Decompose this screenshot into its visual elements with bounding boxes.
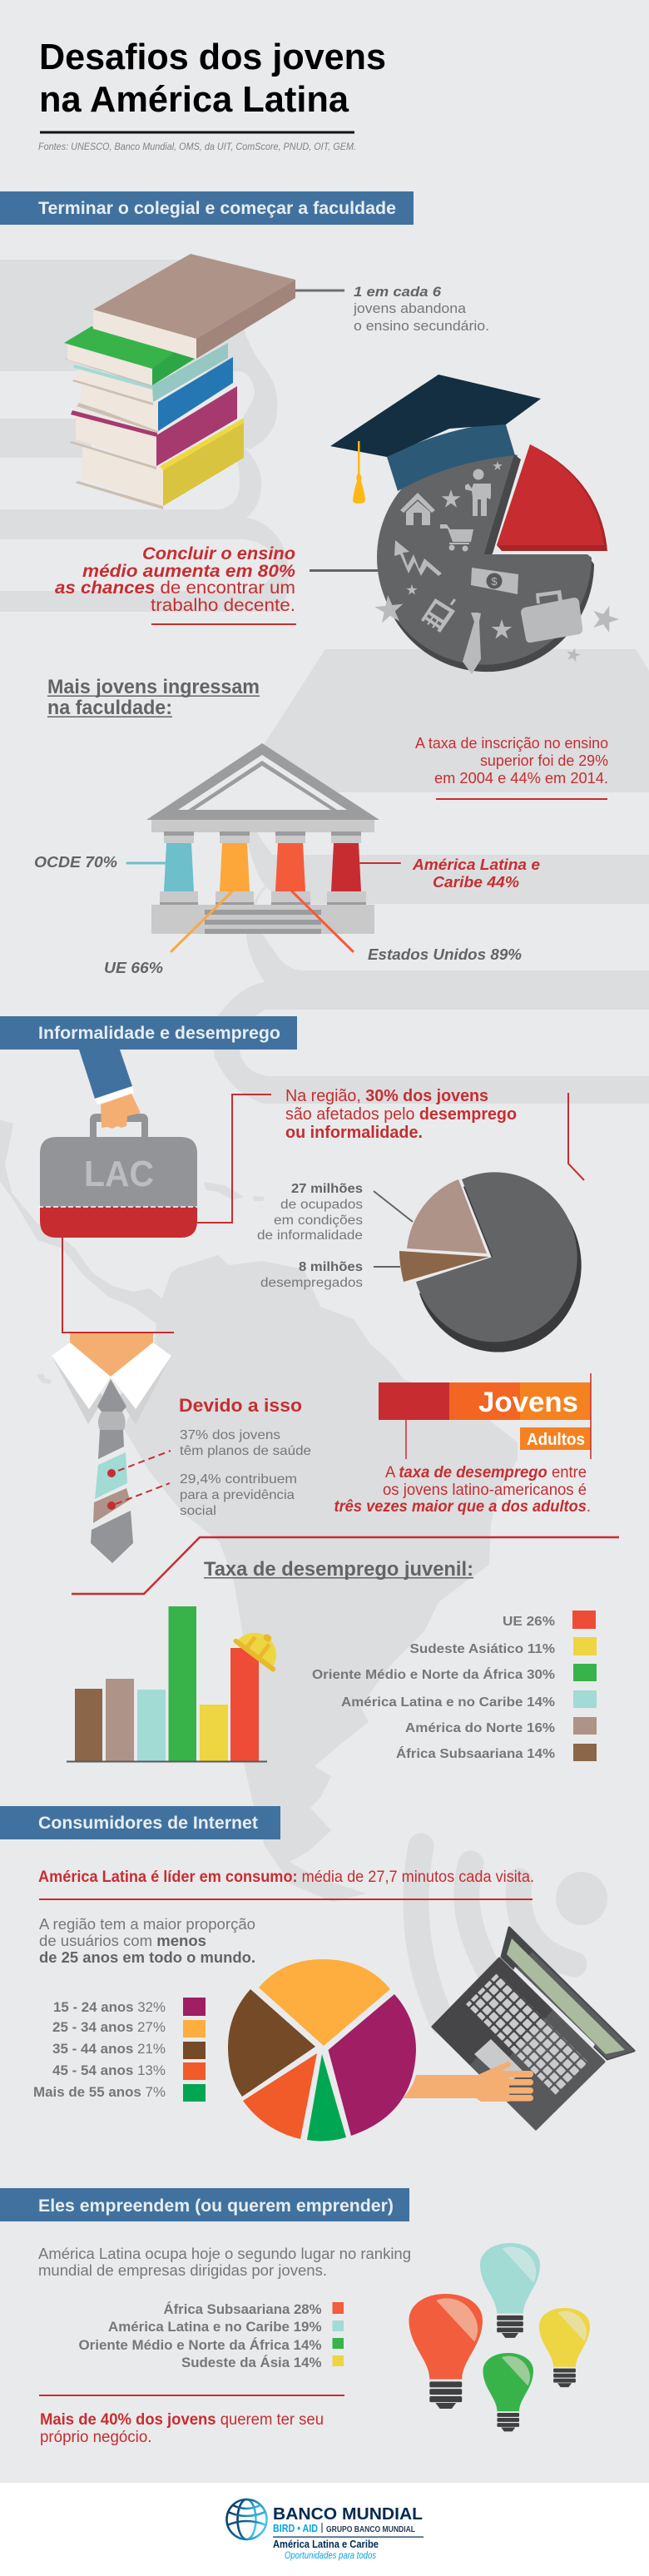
text: ranking mundial — [38, 2246, 411, 2279]
label: América Latina e Caribe: Caribe 44% — [433, 874, 519, 891]
illustration: arm holding LAC briefcase: LAC — [84, 1154, 154, 1194]
text: 1 em cada 6: o ensino secundário. — [354, 318, 489, 334]
text: 30% dos jovens: Na região, 30% dos jovens — [285, 1087, 488, 1105]
section banner: Eles empreendem: Eles empreendem (ou querem emprender) — [38, 2196, 394, 2216]
text: ranking mundial: América Latina ocupa hoje o segundo lugar no ranking — [38, 2246, 411, 2262]
text: taxa de desemprego: os jovens latino-americanos é — [383, 1482, 587, 1499]
label: América Latina e Caribe — [412, 856, 540, 891]
text: mais de 40% — [40, 2411, 324, 2446]
legend: age groups: 15 - 24 anos 32% — [53, 1999, 166, 2015]
pie chart: age groups — [228, 1959, 416, 2141]
legend: youth unemployment: Sudeste Asiático 11% — [409, 1642, 555, 1656]
text: concluir o ensino — [55, 544, 295, 615]
red connector lines — [62, 1093, 584, 1333]
slice: informalidade — [407, 1179, 487, 1253]
illustration: arm holding LAC briefcase — [38, 1050, 197, 1238]
bar: Adultos: Adultos — [527, 1431, 585, 1449]
text: taxa de desemprego — [334, 1464, 591, 1516]
text: concluir o ensino: Concluir o ensino — [142, 544, 295, 563]
legend: age groups: 45 - 54 anos 13% — [52, 2062, 166, 2078]
text: taxa de inscrição: A taxa de inscrição no ensino — [415, 735, 608, 752]
illustration: stack of books — [64, 254, 295, 509]
heading: Mais jovens ingressam — [47, 676, 260, 719]
label: 27 milhões: de ocupados — [280, 1198, 363, 1212]
logo text: Banco Mundial: BANCO MUNDIAL — [273, 2505, 423, 2524]
legend: youth unemployment: Oriente Médio e Norte da África 30% — [312, 1666, 555, 1682]
slice: mais de 55 anos — [307, 2054, 346, 2141]
text: previdência social — [180, 1472, 297, 1518]
slice: 45-54 anos — [243, 2053, 317, 2139]
illustration: laptop — [433, 1928, 634, 2129]
section banner: Informalidade — [0, 1016, 297, 1050]
legend: youth unemployment: UE 26% — [503, 1615, 555, 1629]
logo text: Banco Mundial — [273, 2505, 424, 2561]
section banner: Informalidade: Informalidade e desemprego — [38, 1024, 280, 1043]
heading: Devido a isso: Devido a isso — [179, 1395, 302, 1416]
title: Desafios dos jovens — [39, 37, 386, 77]
text: 30% dos jovens — [285, 1087, 517, 1142]
slice: 15-24 anos — [328, 1994, 416, 2136]
text: líder em consumo: América Latina é líder em consumo: média de 27,7 minutos cada visita. — [38, 1869, 534, 1886]
text: maior proporção: de 25 anos em todo o mundo. — [39, 1949, 255, 1966]
label: 27 milhões: em condições — [274, 1214, 363, 1228]
text: planos de saúde — [180, 1428, 311, 1458]
legend: youth unemployment: América Latina e no Caribe 14% — [341, 1695, 555, 1710]
legend: youth unemployment: África Subsaariana 14% — [396, 1745, 555, 1761]
heading: Mais jovens ingressam: Mais jovens ingressam — [47, 676, 260, 698]
bar chart: youth unemployment — [67, 1606, 290, 1763]
university building with four columns — [146, 743, 379, 934]
text: taxa de inscrição: superior foi de 29% — [480, 752, 608, 769]
bar: Jovens: Jovens — [478, 1387, 578, 1418]
text: taxa de inscrição: em 2004 e 44% em 2014. — [434, 770, 608, 787]
text: mais de 40%: Mais de 40% dos jovens querem ter seu — [40, 2411, 324, 2429]
sources: Fontes: UNESCO, Banco Mundial, OMS, da UIT, ComScore, PNUD, OIT, GEM. — [38, 141, 356, 152]
text: 1 em cada 6: 1 em cada 6 — [354, 284, 442, 300]
label: 27 milhões: 27 milhões — [291, 1182, 363, 1196]
illustration: shirt collar and tie — [52, 1333, 171, 1563]
slice: 25-34 anos — [259, 1959, 390, 2046]
label: 27 milhões — [257, 1182, 363, 1243]
column: América Latina e Caribe — [331, 843, 361, 891]
label: UE: UE 66% — [104, 960, 163, 976]
label: 27 milhões: de informalidade — [257, 1228, 363, 1243]
leader lines to columns — [127, 863, 400, 951]
logo text: Banco Mundial: GRUPO BANCO MUNDIAL — [326, 2525, 415, 2534]
text: concluir o ensino: as chances de encontrar um — [55, 578, 295, 598]
background pattern: stacked books — [0, 260, 649, 1104]
text: 30% dos jovens: são afetados pelo desemprego — [285, 1105, 517, 1124]
text: previdência social: para a previdência — [180, 1488, 295, 1502]
graduation cap — [330, 375, 541, 504]
icon: green light bulb — [483, 2353, 533, 2431]
text: 30% dos jovens: ou informalidade. — [285, 1124, 423, 1142]
text: taxa de desemprego: A taxa de desemprego entre — [385, 1464, 587, 1482]
text: 1 em cada 6: jovens abandona — [353, 300, 467, 316]
label: 8 milhões — [260, 1260, 363, 1290]
text: maior proporção — [39, 1916, 255, 1966]
legend: entrepreneurs: Sudeste da Ásia 14% — [181, 2355, 321, 2370]
leader line — [310, 569, 379, 572]
legend: youth unemployment: América do Norte 16% — [405, 1721, 555, 1735]
red slice — [497, 444, 607, 551]
logo text: Banco Mundial: BIRD • AID — [273, 2523, 318, 2534]
pie chart: informalidade — [399, 1172, 582, 1353]
background icon: wifi arcs — [416, 1846, 607, 2023]
section banner: Terminar o colegial: Terminar o colegial e começar a faculdade — [38, 199, 396, 218]
label: América Latina e Caribe: América Latina e — [412, 856, 540, 873]
section banner: Consumidores de Internet — [0, 1806, 280, 1839]
section banner: Terminar o colegial — [0, 191, 414, 225]
heading: Taxa de desemprego juvenil: Taxa de desemprego juvenil: — [204, 1558, 473, 1581]
leader lines for pie — [374, 1191, 413, 1267]
title — [39, 37, 386, 120]
text: planos de saúde: 37% dos jovens — [180, 1428, 280, 1442]
label: Estados Unidos: Estados Unidos 89% — [368, 946, 522, 963]
icon: dollar coin: $ — [491, 575, 498, 588]
red divider — [72, 1537, 619, 1594]
icon: yellow light bulb — [539, 2308, 590, 2387]
icon: red light bulb — [409, 2294, 483, 2409]
section banner: Eles empreendem — [0, 2188, 409, 2221]
slice: 35-44 anos — [228, 1989, 315, 2097]
icon: teal light bulb — [480, 2243, 540, 2338]
icon: hard hat — [232, 1620, 290, 1673]
legend: age groups: Mais de 55 anos 7% — [33, 2084, 166, 2100]
label: OCDE: OCDE 70% — [34, 854, 117, 871]
legend: entrepreneurs — [78, 2301, 344, 2370]
column: OCDE — [164, 843, 194, 891]
column: Estados Unidos — [275, 843, 305, 891]
logo text: Banco Mundial: América Latina e Caribe — [273, 2539, 379, 2550]
label: 8 milhões: 8 milhões — [299, 1260, 363, 1274]
leader line — [295, 290, 344, 291]
label: 8 milhões: desempregados — [260, 1276, 363, 1290]
text: maior proporção: de usuários com menos — [39, 1933, 206, 1949]
column: UE — [220, 843, 250, 891]
text: maior proporção: A região tem a maior proporção — [39, 1916, 255, 1933]
legend: youth unemployment — [312, 1611, 597, 1761]
legend: entrepreneurs: América Latina e no Caribe 19% — [108, 2319, 321, 2335]
text: ranking mundial: mundial de empresas dirigidas por jovens. — [38, 2262, 327, 2279]
legend: age groups: 35 - 44 anos 21% — [52, 2041, 166, 2057]
background map: Latin America — [0, 1119, 518, 1902]
text: 1 em cada 6 — [353, 284, 489, 334]
text: concluir o ensino: trabalho decente. — [151, 596, 295, 615]
slice: desempregados — [399, 1251, 489, 1282]
text: taxa de desemprego: três vezes maior que a dos adultos. — [334, 1498, 591, 1516]
legend: age groups: 25 - 34 anos 27% — [52, 2019, 166, 2035]
pie chart with icons — [330, 375, 622, 674]
bar comparison: Jovens vs Adultos — [379, 1373, 591, 1459]
icon: dollar coin — [486, 573, 503, 589]
footer band — [0, 2483, 649, 2576]
legend: age groups — [33, 1998, 206, 2102]
text: concluir o ensino: médio aumenta em 80% — [82, 562, 295, 581]
legend: entrepreneurs: África Subsaariana 28% — [163, 2301, 321, 2317]
bar: Jovens — [379, 1382, 591, 1420]
title: na América Latina — [39, 79, 349, 120]
text: previdência social: social — [180, 1504, 216, 1518]
illustration: arm and hand — [403, 2062, 533, 2102]
text: planos de saúde: têm planos de saúde — [180, 1444, 311, 1458]
text: taxa de inscrição — [415, 735, 608, 787]
text: previdência social: 29,4% contribuem — [180, 1472, 297, 1487]
logo: World Bank globe — [226, 2499, 266, 2539]
heading: Mais jovens ingressam: na faculdade: — [47, 697, 172, 719]
legend: entrepreneurs: Oriente Médio e Norte da África 14% — [78, 2337, 321, 2353]
icon: mobile phone — [421, 598, 456, 633]
icons on pie — [374, 461, 622, 674]
text: mais de 40%: próprio negócio. — [40, 2429, 151, 2446]
section banner: Consumidores de Internet: Consumidores de Internet — [38, 1814, 258, 1833]
logo text: Banco Mundial: Oportunidades para todos — [285, 2549, 376, 2561]
